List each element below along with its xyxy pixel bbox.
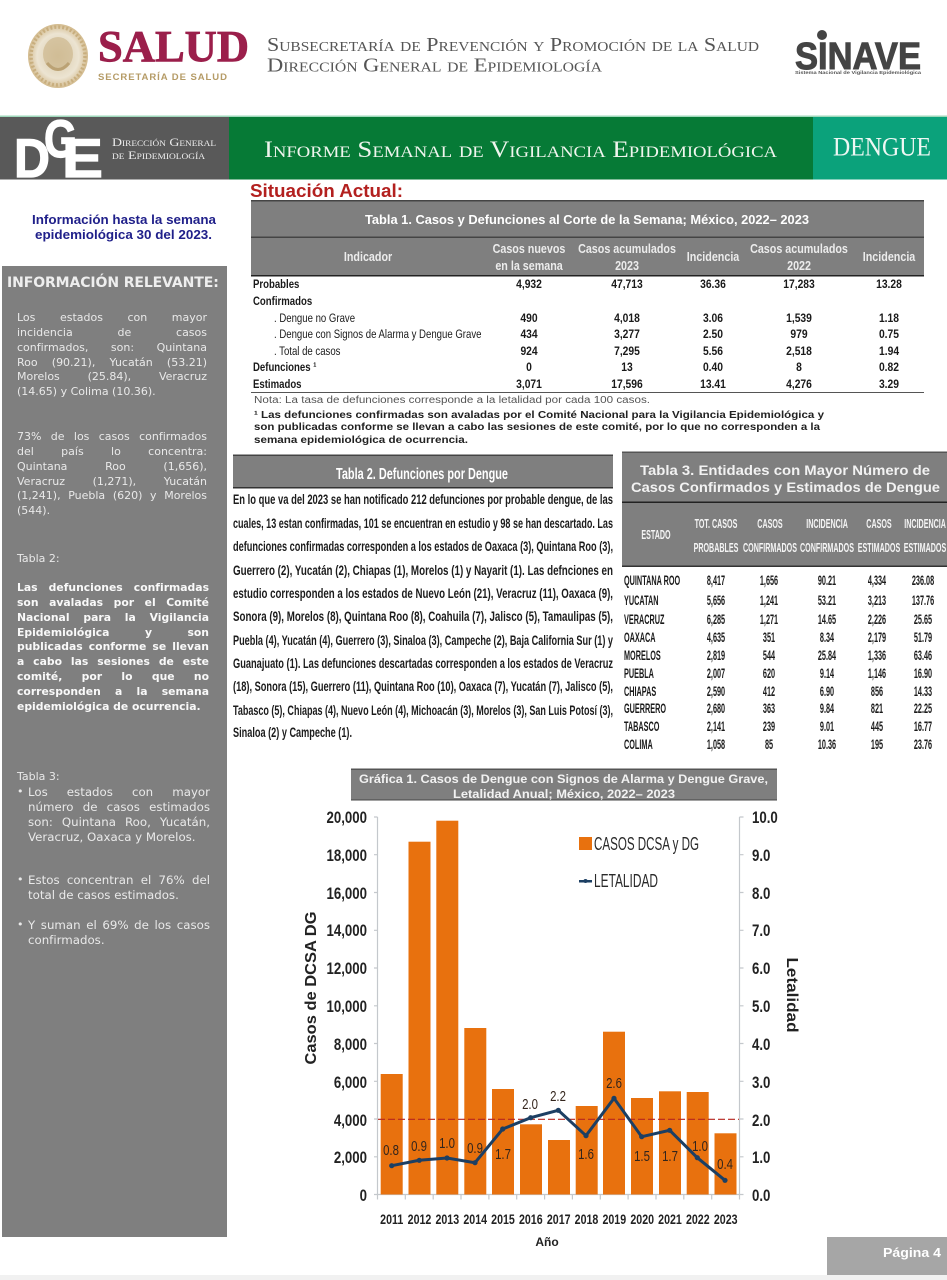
text: deaths paragraph: defunciones confirmadas corresponden a los estados de Oaxaca (3), Quintana Roo (3), <box>233 538 613 554</box>
left axis labels: 6,000 <box>334 1074 367 1092</box>
text: deaths paragraph: Tabasco (5), Chiapas (4), Nuevo León (4), Michoacán (3), Morelos (3), San Luis Potosí (3), <box>233 702 613 718</box>
row: Tabasco: 16.77 <box>914 720 932 735</box>
row: Total de casos: . Total de casos <box>274 345 341 358</box>
row: Oaxaca: OAXACA <box>624 631 656 646</box>
table 1: cases and deaths: 2022 <box>787 259 811 273</box>
icon: bullet: • <box>17 785 24 798</box>
text: table 1 notes: semana epidemiológica de ocurrencia. <box>254 434 468 446</box>
text: 73 percent concentration: Veracruz (1,271), Yucatán <box>17 475 207 488</box>
row: Probables: 4,932 <box>516 278 542 291</box>
row: Oaxaca: 351 <box>763 631 775 646</box>
data labels: lethality values: 2.6 <box>606 1074 622 1091</box>
row: Yucatan: 1,241 <box>760 594 778 609</box>
row: Chiapas: 2,590 <box>707 685 725 700</box>
row: Yucatan: 5,656 <box>707 594 725 609</box>
reference line at 2.0 <box>378 1118 739 1120</box>
text: deaths paragraph: (18), Sonora (15), Guerrero (11), Quintana Roo (10), Oaxaca (7), Yucatán (7), Jalisco (5), <box>233 678 613 694</box>
table 1: cases and deaths <box>251 200 924 393</box>
row: Probables: 36.36 <box>700 278 726 291</box>
text: table 1 notes: son publicadas conforme se llevan a cabo las sesiones de este comité, por lo que no corresponden a la <box>254 421 820 433</box>
x axis labels: 2018 <box>575 1212 598 1227</box>
row: Defunciones: 0 <box>526 361 532 374</box>
row: Tabasco: 2,141 <box>707 720 725 735</box>
table 3 column headers: TOT. CASOS <box>695 518 737 532</box>
table 1: cases and deaths: 2023 <box>615 259 639 273</box>
table 3 column headers: ESTADO <box>641 529 671 543</box>
row: Morelos: 544 <box>763 649 775 664</box>
row: Dengue no Grave: 4,018 <box>614 312 640 325</box>
text: Dirección General de Epidemiología: de Epidemiología <box>112 148 205 162</box>
row: Dengue no Grave: . Dengue no Grave <box>274 312 355 325</box>
heading: institutional header: Subsecretaría de Prevención y Promoción de la Salud <box>267 34 759 56</box>
row: Colima: COLIMA <box>624 738 653 753</box>
row: Chiapas <box>624 685 932 700</box>
row: Colima: 195 <box>871 738 883 753</box>
chart heading: Gráfica 1 <box>351 768 777 801</box>
text: Tabla 2 note: Epidemiológica y son <box>17 626 209 639</box>
text: deaths paragraph: Puebla (4), Yucatán (4), Guerrero (3), Sinaloa (3), Campeche (2), Baja California Sur (1) y <box>233 632 613 648</box>
text: Tabla 3 bullet two: Estos concentran el 76% del <box>28 873 210 887</box>
x axis labels <box>380 1212 738 1227</box>
left axis labels: 16,000 <box>326 885 367 903</box>
text: highest incidence states: Morelos (25.84), Veracruz <box>17 370 207 383</box>
row: Chiapas: 856 <box>871 685 883 700</box>
table 3 column headers: ESTIMADOS <box>904 542 946 556</box>
line: LETALIDAD <box>389 1096 728 1183</box>
logo: DGE <box>14 110 103 189</box>
row: Tabasco: 239 <box>763 720 775 735</box>
row: Dengue con Signos de Alarma: 979 <box>790 328 808 341</box>
row: Guerrero: 2,680 <box>707 702 725 717</box>
row: Dengue no Grave: 1,539 <box>786 312 812 325</box>
x axis labels: 2014 <box>463 1212 487 1227</box>
text: deaths paragraph: En lo que va del 2023 se han notificado 212 defunciones por probable dengue, de las <box>233 491 613 507</box>
text: 73 percent concentration <box>17 430 207 517</box>
table 1: cases and deaths: Indicador <box>344 250 393 264</box>
row: Probables: 17,283 <box>783 278 815 291</box>
bars: CASOS DCSA y DG <box>381 821 736 1194</box>
data labels: lethality values <box>383 1074 734 1172</box>
text: 73 percent concentration: (544). <box>17 504 50 517</box>
text: Tabla 3 bullet one: Los estados con mayor <box>28 785 210 799</box>
text: Tabla 3 bullet two <box>28 873 210 902</box>
row: Guerrero: GUERRERO <box>624 702 666 717</box>
data labels: lethality values: 1.7 <box>662 1147 678 1164</box>
row: Morelos: 1,336 <box>868 649 886 664</box>
row: Oaxaca: 4,635 <box>707 631 725 646</box>
footer: page number: Página 4 <box>883 1246 941 1260</box>
text: Tabla 2 note: epidemiológica de ocurrencia. <box>17 700 201 713</box>
left axis title: Casos de DCSA DG <box>303 912 320 1064</box>
row: Quintana Roo: 1,656 <box>760 574 778 589</box>
text: deaths paragraph <box>233 491 613 740</box>
row: Total de casos: 2,518 <box>786 345 812 358</box>
left axis labels: 8,000 <box>334 1036 367 1054</box>
text: Tabla 3 bullet one: número de casos estimados <box>28 800 210 814</box>
text: 73 percent concentration: Quintana Roo (1,656), <box>17 460 207 473</box>
x axis labels: 2021 <box>658 1212 682 1227</box>
text: Tabla 2 note: son avaladas por el Comité <box>17 596 209 609</box>
text: Tabla 3 bullet one <box>28 785 210 844</box>
text: Tabla 2 note: Las defunciones confirmadas <box>17 581 209 594</box>
row: Oaxaca: 8.34 <box>820 631 834 646</box>
row: Defunciones: 8 <box>796 361 802 374</box>
label: DENGUE: DENGUE <box>833 132 931 162</box>
row: Probables <box>253 278 902 291</box>
left axis labels: 0 <box>360 1187 367 1205</box>
text: Tabla 2 note: publicadas conforme se llevan <box>17 640 209 653</box>
text: deaths paragraph: Guerrero (2), Yucatán (2), Chiapas (1), Morelos (1) y Nayarit (1). Las defnciones en <box>233 562 613 578</box>
row: Estimados: 17,596 <box>611 378 643 391</box>
row: Total de casos: 7,295 <box>614 345 640 358</box>
right axis labels: 9.0 <box>752 847 770 865</box>
chart: dengue cases and lethality 2011-2023 <box>303 809 800 1249</box>
text: Tabla 2 label: Tabla 2: <box>17 552 60 565</box>
row: Confirmados: Confirmados <box>253 295 312 308</box>
right axis labels: 2.0 <box>752 1112 770 1130</box>
text: 73 percent concentration: 73% de los casos confirmados <box>17 430 207 443</box>
text: highest incidence states: Los estados con mayor <box>17 311 207 324</box>
row: Quintana Roo: 8,417 <box>707 574 725 589</box>
row: Veracruz: 14.65 <box>818 613 836 628</box>
left axis labels: 14,000 <box>326 922 367 940</box>
data labels: lethality values: 0.9 <box>411 1137 427 1154</box>
row: Tabasco: 9.01 <box>820 720 834 735</box>
row: Colima: 23.76 <box>914 738 932 753</box>
left axis labels: 4,000 <box>334 1112 367 1130</box>
text: information cut-off: epidemiológica 30 del 2023. <box>35 228 212 242</box>
data labels: lethality values: 1.6 <box>578 1145 594 1162</box>
logo: SINAVE: Sistema Nacional de Vigilancia Epidemiológica <box>795 70 922 75</box>
text: table 1 notes: Nota: La tasa de defunciones corresponde a la letalidad por cada 100 casos. <box>254 395 650 406</box>
right axis labels: 7.0 <box>752 922 770 940</box>
text: information cut-off <box>32 213 217 242</box>
table 3 column headers: INCIDENCIA <box>806 518 848 532</box>
text: table 1 notes <box>254 395 824 446</box>
row: Morelos: 25.84 <box>818 649 836 664</box>
data labels: lethality values: 2.0 <box>522 1095 538 1112</box>
row: Veracruz <box>624 613 932 628</box>
right axis title: Letalidad <box>783 958 800 1032</box>
heading: institutional header: Dirección General de Epidemiología <box>267 54 603 76</box>
row: Defunciones: 0.82 <box>879 361 899 374</box>
footer: page number <box>0 1237 947 1280</box>
row: Chiapas: CHIAPAS <box>624 685 656 700</box>
text: Tabla 3 bullet three: confirmados. <box>28 933 105 947</box>
text: Tabla 2 note: a cabo las sesiones de este <box>17 655 209 668</box>
table 3 column headers: INCIDENCIA <box>904 518 946 532</box>
table 3: states with most cases: Tabla 3. Entidades con Mayor Número de <box>640 462 930 478</box>
row: Yucatan: YUCATAN <box>624 594 659 609</box>
row: Guerrero: 9.84 <box>820 702 834 717</box>
row: Estimados <box>253 378 899 391</box>
text: Tabla 3 bullet three <box>28 918 210 947</box>
data labels: lethality values: 2.2 <box>550 1087 566 1104</box>
table 1: cases and deaths: Casos acumulados <box>578 242 676 256</box>
text: information cut-off: Información hasta la semana <box>32 213 217 227</box>
right axis labels: 0.0 <box>752 1187 770 1205</box>
text: Tabla 3 bullet one: son: Quintana Roo, Yucatán, <box>28 815 210 829</box>
left axis labels: 20,000 <box>326 809 367 827</box>
text: Dirección General de Epidemiología: Dirección General <box>112 135 216 149</box>
x axis labels: 2019 <box>602 1212 626 1227</box>
row: Estimados: 3,071 <box>516 378 542 391</box>
table 3 column headers: PROBABLES <box>694 542 738 556</box>
row: Colima: 1,058 <box>707 738 725 753</box>
row: Colima: 10.36 <box>818 738 836 753</box>
row: Chiapas: 412 <box>763 685 775 700</box>
x axis labels: 2023 <box>714 1212 738 1227</box>
left axis labels: 12,000 <box>326 960 367 978</box>
text: deaths paragraph: Sinaloa (2) y Campeche (1). <box>233 724 352 740</box>
row: Morelos: 2,819 <box>707 649 725 664</box>
text: Tabla 3 bullet one: Veracruz, Oaxaca y Morelos. <box>28 830 196 844</box>
row: Estimados: 13.41 <box>700 378 726 391</box>
data labels: lethality values: 1.7 <box>495 1145 511 1162</box>
x axis labels: 2011 <box>380 1212 403 1227</box>
row: Quintana Roo: 236.08 <box>912 574 934 589</box>
chart axes <box>374 817 744 1200</box>
table 1: cases and deaths: Incidencia <box>687 250 740 264</box>
icon: bullet: • <box>17 918 24 931</box>
table 3: states with most cases: Casos Confirmados y Estimados de Dengue <box>631 479 940 495</box>
table 1: cases and deaths: Casos nuevos <box>493 242 565 256</box>
right axis labels: 1.0 <box>752 1149 770 1167</box>
logo: SALUD: SALUD <box>98 22 249 71</box>
left axis labels: 18,000 <box>326 847 367 865</box>
row: Quintana Roo: 90.21 <box>818 574 836 589</box>
row: Dengue con Signos de Alarma: 0.75 <box>879 328 899 341</box>
text: 73 percent concentration: (1,241), Puebla (620) y Morelos <box>17 489 207 502</box>
left axis labels <box>326 809 367 1205</box>
row: Total de casos: 924 <box>520 345 538 358</box>
row: Puebla: 620 <box>763 667 775 682</box>
text: deaths paragraph: Sonora (9), Morelos (8), Quintana Roo (8), Coahuila (7), Jalisco (5), Tamaulipas (5), <box>233 608 613 624</box>
row: Yucatan <box>624 594 934 609</box>
x axis labels: 2017 <box>547 1212 571 1227</box>
x axis title: Año <box>535 1235 559 1249</box>
row: Puebla: 1,146 <box>868 667 886 682</box>
logo: DGE: D <box>14 127 50 189</box>
logo: DGE: E <box>62 127 103 189</box>
row: Guerrero <box>624 702 932 717</box>
row: Tabasco: 445 <box>871 720 883 735</box>
x axis labels: 2015 <box>491 1212 515 1227</box>
table 3 column headers <box>641 518 946 556</box>
row: Dengue con Signos de Alarma: . Dengue con Signos de Alarma y Dengue Grave <box>274 328 481 341</box>
logo: DGE: G <box>44 110 77 169</box>
row: Morelos <box>624 649 932 664</box>
row: Veracruz: 2,226 <box>868 613 886 628</box>
row: Dengue con Signos de Alarma: 434 <box>520 328 538 341</box>
row: Yucatan: 53.21 <box>818 594 836 609</box>
icon: bullet: • <box>17 873 24 886</box>
legend: CASOS DCSA y DG <box>594 834 699 854</box>
row: Dengue no Grave: 1.18 <box>879 312 899 325</box>
heading: institutional header <box>267 34 759 76</box>
text: deaths paragraph: Guanajuato (1). Las defunciones descartadas corresponden a los estados de Veracruz <box>233 655 613 671</box>
row: Quintana Roo <box>624 574 934 589</box>
right axis labels: 5.0 <box>752 998 770 1016</box>
panel: Tabla 2 deaths <box>233 454 613 740</box>
row: Puebla <box>624 667 932 682</box>
text: deaths paragraph: estudio corresponden a los estados de Nuevo León (21), Veracruz (11), Oaxaca (9), <box>233 585 613 601</box>
row: Defunciones <box>253 361 899 374</box>
text: Tabla 3 bullet three: Y suman el 69% de los casos <box>28 918 210 932</box>
row: Dengue no Grave: 3.06 <box>703 312 723 325</box>
row: Guerrero: 22.25 <box>914 702 932 717</box>
x axis labels: 2016 <box>519 1212 543 1227</box>
right axis labels: 6.0 <box>752 960 770 978</box>
text: Dirección General de Epidemiología <box>112 135 216 162</box>
row: Puebla: 2,007 <box>707 667 725 682</box>
row: Veracruz: 1,271 <box>760 613 778 628</box>
table 1: cases and deaths: Incidencia <box>863 250 916 264</box>
text: Tabla 2 note: comité, por lo que no <box>17 670 209 683</box>
legend: LETALIDAD <box>594 871 658 891</box>
chart heading: Gráfica 1: Letalidad Anual; México, 2022– 2023 <box>453 787 675 801</box>
x axis labels: 2012 <box>408 1212 431 1227</box>
row: Guerrero: 363 <box>763 702 775 717</box>
table 1: cases and deaths: Tabla 1. Casos y Defunciones al Corte de la Semana; México, 2022– 2023 <box>365 213 809 227</box>
panel: información relevante sidebar <box>2 266 227 1237</box>
data labels: lethality values: 1.0 <box>439 1134 455 1151</box>
row: Estimados: 3.29 <box>879 378 899 391</box>
table 3 column headers: ESTIMADOS <box>858 542 900 556</box>
row: Quintana Roo: QUINTANA ROO <box>624 574 680 589</box>
legend <box>579 834 699 891</box>
row: Oaxaca: 51.79 <box>914 631 932 646</box>
row: Estimados: 4,276 <box>786 378 812 391</box>
title: Informe Semanal de Vigilancia Epidemiológica <box>264 137 778 162</box>
right axis labels: 8.0 <box>752 885 770 903</box>
text: 73 percent concentration: del país lo concentra: <box>17 445 207 458</box>
logo: SINAVE: SINAVE <box>795 36 921 78</box>
data labels: lethality values: 0.9 <box>467 1139 483 1156</box>
text: highest incidence states: (14.65) y Colima (10.36). <box>17 385 156 398</box>
row: Tabasco <box>624 720 932 735</box>
right axis labels: 4.0 <box>752 1036 770 1054</box>
row: Total de casos: 1.94 <box>879 345 900 358</box>
data labels: lethality values: 1.0 <box>692 1137 708 1154</box>
row: Total de casos: 5.56 <box>703 345 723 358</box>
row: Morelos: MORELOS <box>624 649 661 664</box>
text: table 1 notes: ¹ Las defunciones confirmadas son avaladas por el Comité Nacional para la Vigilancia Epidemiológica y <box>254 409 824 421</box>
left axis labels: 2,000 <box>334 1149 367 1167</box>
x axis labels: 2022 <box>686 1212 710 1227</box>
text: deaths paragraph: cuales, 13 estan confirmadas, 101 se encuentran en estudio y 98 se han descartado. Las <box>233 515 613 531</box>
text: highest incidence states: confirmados, son: Quintana <box>17 341 207 354</box>
row: Tabasco: TABASCO <box>624 720 659 735</box>
row: Colima: 85 <box>765 738 773 753</box>
row: Morelos: 63.46 <box>914 649 932 664</box>
row: Veracruz: 6,285 <box>707 613 725 628</box>
row: Guerrero: 821 <box>871 702 883 717</box>
row: Yucatan: 3,213 <box>868 594 886 609</box>
row: Defunciones: 0.40 <box>703 361 723 374</box>
text: Tabla 2 note <box>17 581 209 713</box>
data labels: lethality values: 0.4 <box>717 1155 734 1172</box>
table 3 column headers: CASOS <box>757 518 783 532</box>
data labels: lethality values: 1.5 <box>634 1147 650 1164</box>
chart heading: Gráfica 1: Gráfica 1. Casos de Dengue con Signos de Alarma y Dengue Grave, <box>359 772 768 786</box>
row: Chiapas: 14.33 <box>914 685 932 700</box>
table 3 column headers: CASOS <box>866 518 892 532</box>
row: Oaxaca: 2,179 <box>868 631 886 646</box>
icon: Mexican national emblem <box>28 24 88 88</box>
row: Chiapas: 6.90 <box>820 685 834 700</box>
row: Veracruz: VERACRUZ <box>624 613 665 628</box>
row: Quintana Roo: 4,334 <box>868 574 886 589</box>
row: Dengue con Signos de Alarma: 3,277 <box>614 328 640 341</box>
row: Veracruz: 25.65 <box>914 613 932 628</box>
text: Tabla 3 bullet two: total de casos estimados. <box>28 888 179 902</box>
heading: Situación Actual: Situación Actual: <box>250 181 403 201</box>
row: Probables: 47,713 <box>611 278 643 291</box>
left axis labels: 10,000 <box>326 998 367 1016</box>
row: Defunciones: Defunciones ¹ <box>253 361 317 374</box>
table 3 column headers: CONFIRMADOS <box>800 542 854 556</box>
row: Dengue con Signos de Alarma <box>274 328 899 341</box>
panel: Tabla 2 deaths: Tabla 2. Defunciones por Dengue <box>336 466 508 483</box>
text: highest incidence states <box>17 311 207 398</box>
text: Tabla 3 label: Tabla 3: <box>17 770 60 783</box>
x axis labels: 2020 <box>630 1212 654 1227</box>
row: Puebla: 9.14 <box>820 667 834 682</box>
row: Yucatan: 137.76 <box>912 594 934 609</box>
row: Oaxaca <box>624 631 932 646</box>
x axis labels: 2013 <box>435 1212 459 1227</box>
logo: SALUD: SECRETARÍA DE SALUD <box>98 72 227 83</box>
row: Probables: Probables <box>253 278 299 291</box>
row: Estimados: Estimados <box>253 378 302 391</box>
table 1: cases and deaths: Casos acumulados <box>750 242 848 256</box>
row: Dengue no Grave <box>274 312 899 325</box>
text: highest incidence states: Roo (90.21), Yucatán (53.21) <box>17 356 207 369</box>
row: Defunciones: 13 <box>621 361 633 374</box>
row: Dengue con Signos de Alarma: 2.50 <box>703 328 723 341</box>
row: Puebla: 16.90 <box>914 667 932 682</box>
right axis labels: 10.0 <box>752 809 778 827</box>
table 3: states with most cases <box>622 452 947 753</box>
row: Colima <box>624 738 932 753</box>
data labels: lethality values: 0.8 <box>383 1141 399 1158</box>
table 1: cases and deaths: en la semana <box>495 259 563 273</box>
text: highest incidence states: incidencia de casos <box>17 326 207 339</box>
right axis labels: 3.0 <box>752 1074 770 1092</box>
right axis labels <box>752 809 778 1205</box>
row: Probables: 13.28 <box>876 278 902 291</box>
row: Total de casos <box>274 345 900 358</box>
text: Tabla 2 note: corresponden a la semana <box>17 685 209 698</box>
heading: Información relevante: INFORMACIÓN RELEVANTE: <box>7 275 219 291</box>
banner: report title band <box>0 110 947 189</box>
text: Tabla 2 note: Nacional para la Vigilancia <box>17 611 209 624</box>
row: Puebla: PUEBLA <box>624 667 654 682</box>
row: Dengue no Grave: 490 <box>520 312 538 325</box>
table 3 column headers: CONFIRMADOS <box>743 542 797 556</box>
